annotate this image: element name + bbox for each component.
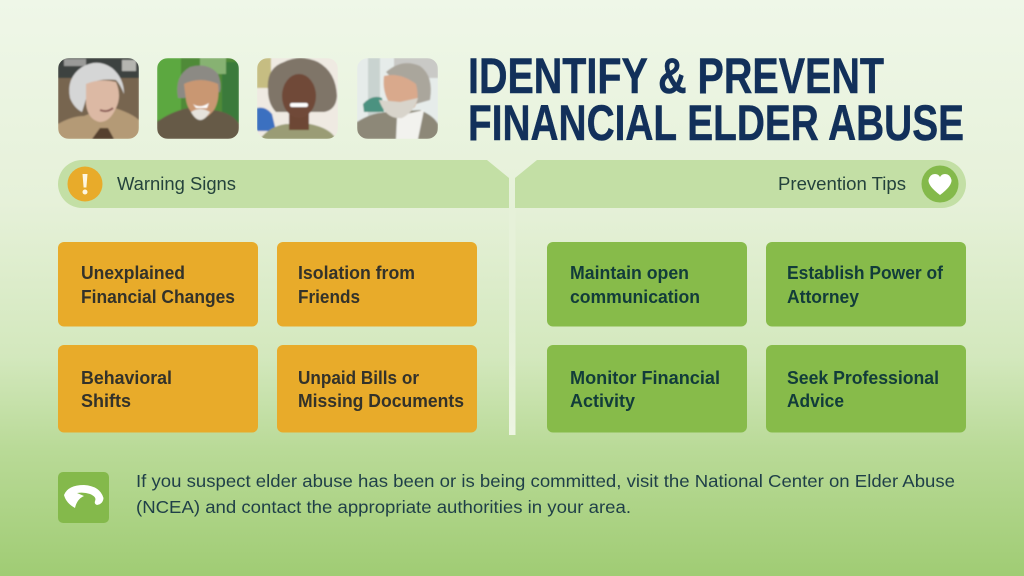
- card: Establish Power of Attorney: Attorney: [787, 287, 859, 307]
- card: Behavioral Shifts: Shifts: [81, 391, 131, 411]
- card: Monitor Financial Activity: [547, 345, 747, 432]
- footer note: (NCEA) and contact the appropriate authorities in your area.: [136, 497, 631, 517]
- prevention tips header: Prevention Tips: [778, 174, 906, 194]
- card: Monitor Financial Activity: Monitor Financial: [570, 368, 720, 388]
- card: Behavioral Shifts: Behavioral: [81, 368, 172, 388]
- card: Maintain open communication: [547, 242, 747, 326]
- photo: smiling woman with curly grey hair: [257, 58, 338, 139]
- card: Isolation from Friends: [277, 242, 477, 326]
- photo: older man with beard looking left: [357, 58, 438, 139]
- footer note: If you suspect elder abuse has been or is being committed, visit the National Center on Elder Abuse: [136, 471, 955, 491]
- card: Unpaid Bills or Missing Documents: Unpaid Bills or: [298, 368, 419, 388]
- card: Seek Professional Advice: Seek Professional: [787, 368, 939, 388]
- photo: elderly woman with white hair: [58, 58, 139, 139]
- card: Unexplained Financial Changes: Unexplained: [81, 263, 185, 283]
- footer note: [136, 471, 955, 517]
- central divider with funnel: [58, 160, 966, 435]
- card: Maintain open communication: communication: [570, 287, 700, 307]
- card: Unexplained Financial Changes: Financial Changes: [81, 287, 235, 307]
- warning signs header: [68, 166, 236, 202]
- title: IDENTIFY & PREVENT: [468, 48, 884, 104]
- card: Unpaid Bills or Missing Documents: [277, 345, 477, 432]
- icon: telephone handset: [58, 472, 109, 523]
- icon: heart: [922, 166, 958, 202]
- card: Monitor Financial Activity: Activity: [570, 391, 635, 411]
- warning signs header: Warning Signs: [117, 174, 236, 194]
- icon: exclamation mark: [68, 166, 102, 202]
- card: Isolation from Friends: Friends: [298, 287, 360, 307]
- title: [468, 48, 964, 151]
- card: Seek Professional Advice: Advice: [787, 391, 844, 411]
- card: Establish Power of Attorney: [766, 242, 966, 326]
- card: Seek Professional Advice: [766, 345, 966, 432]
- card: Behavioral Shifts: [58, 345, 258, 432]
- photo: smiling man with grey hair and goatee: [157, 58, 239, 139]
- card: Unpaid Bills or Missing Documents: Missing Documents: [298, 391, 464, 411]
- card: Maintain open communication: Maintain open: [570, 263, 689, 283]
- prevention tips header: [778, 166, 958, 202]
- card: Isolation from Friends: Isolation from: [298, 263, 415, 283]
- card: Unexplained Financial Changes: [58, 242, 258, 326]
- card: Establish Power of Attorney: Establish Power of: [787, 263, 944, 283]
